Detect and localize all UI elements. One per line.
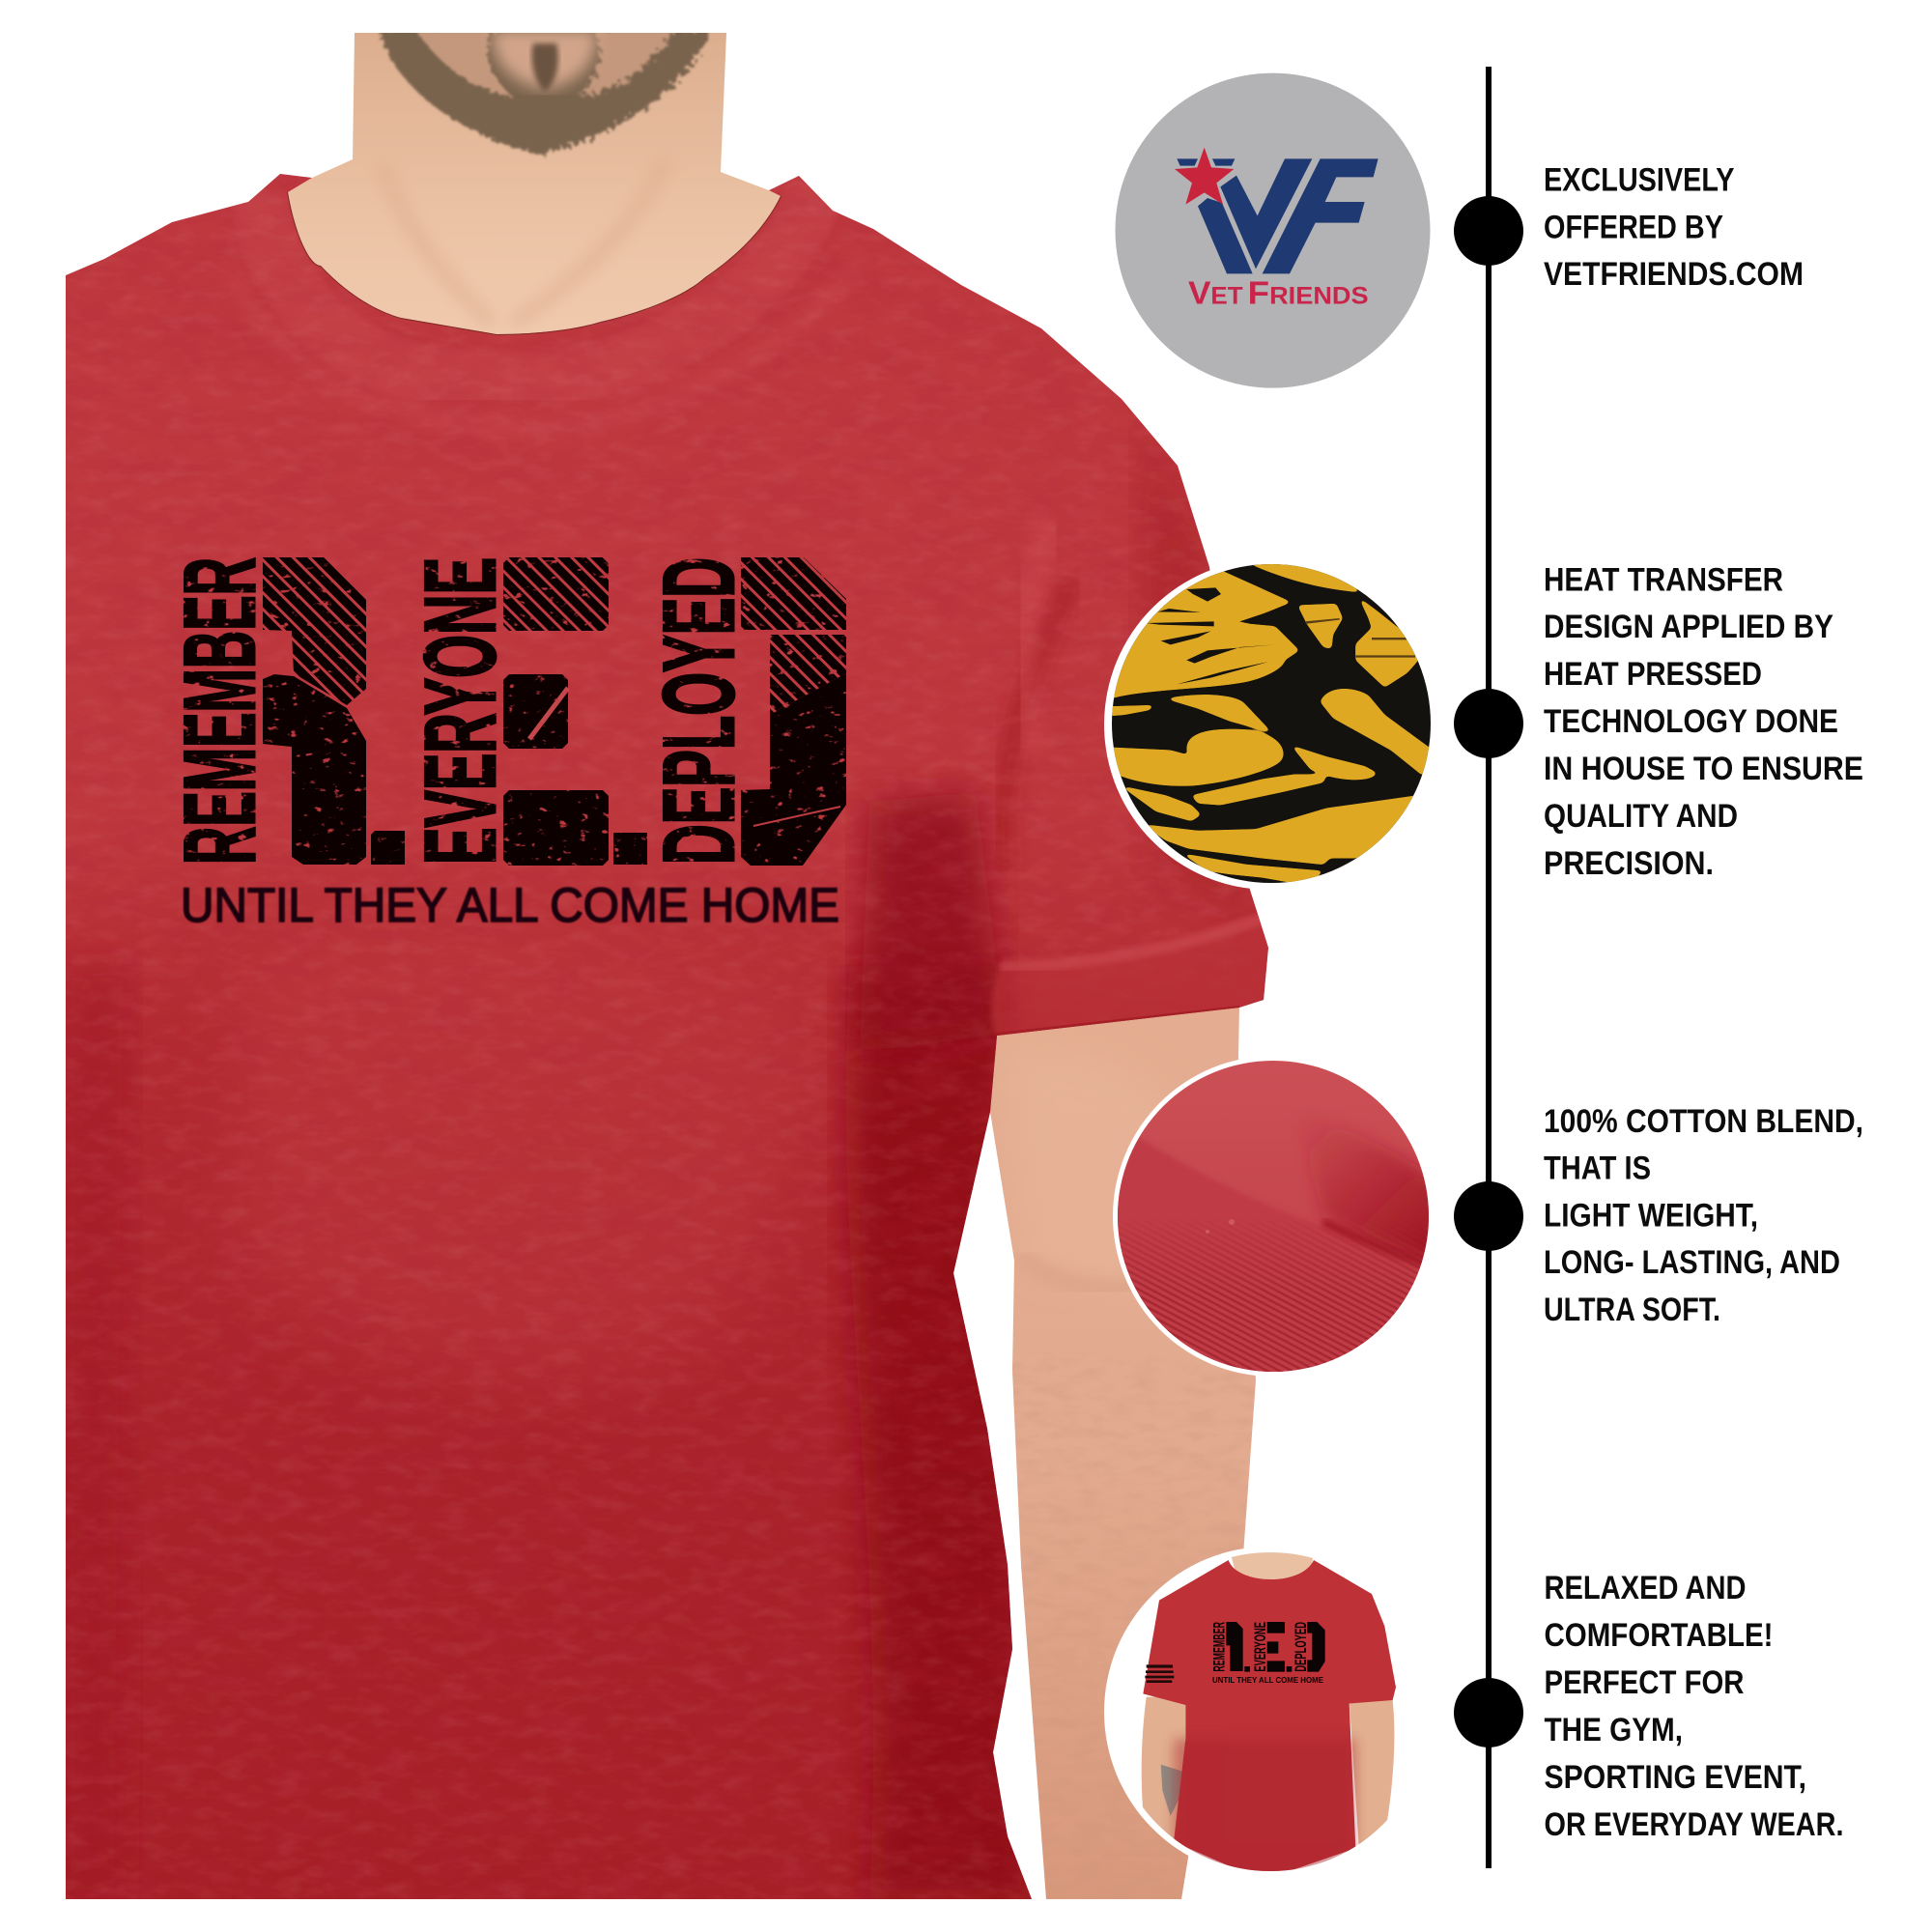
text block: relaxed and comfortable: SPORTING EVENT, [1544, 1759, 1806, 1796]
thumbnail print: EVERYONE [1251, 1622, 1269, 1672]
beard [379, 29, 711, 155]
text block: relaxed and comfortable: PERFECT FOR [1544, 1664, 1745, 1701]
t-shirt body [58, 164, 1285, 1903]
text block: exclusively offered: OFFERED BY [1544, 209, 1723, 245]
circle: fabric close-up [1111, 1053, 1439, 1381]
thumbnail print: UNTIL THEY ALL COME HOME [1212, 1676, 1324, 1685]
logo mark: FRIENDS [1248, 275, 1369, 311]
sleeve hem [991, 908, 1268, 1036]
text block: relaxed and comfortable: COMFORTABLE! [1544, 1617, 1774, 1654]
thumbnail print: DEPLOYED [1292, 1622, 1310, 1672]
text block: heat transfer [1544, 562, 1863, 882]
circle: VetFriends logo [1115, 73, 1430, 388]
thumbnail print [1210, 1622, 1325, 1685]
timeline dot 2 [1454, 689, 1523, 758]
text block: heat transfer: QUALITY AND [1544, 798, 1738, 835]
logo mark: VET [1188, 275, 1243, 311]
logo mark [1175, 148, 1378, 311]
photo: model in red t-shirt [58, 29, 1285, 1903]
thumbnail print: REMEMBER [1210, 1622, 1229, 1672]
vertical word: DEPLOYED: DEPLOYED [643, 557, 755, 865]
text block: heat transfer: TECHNOLOGY DONE [1544, 703, 1838, 740]
timeline dot 1 [1454, 196, 1523, 266]
chest print: R.E.D. design [164, 557, 846, 866]
text block: heat transfer: HEAT TRANSFER [1544, 562, 1783, 599]
big letter D [741, 557, 846, 866]
thumbnail arms [1142, 1697, 1394, 1845]
text block: relaxed and comfortable [1544, 1570, 1843, 1843]
text block: cotton blend: LIGHT WEIGHT, [1544, 1198, 1758, 1235]
text block: relaxed and comfortable: RELAXED AND [1544, 1570, 1747, 1606]
thumbnail sleeve flag [1145, 1664, 1174, 1683]
text block: heat transfer: IN HOUSE TO ENSURE [1544, 751, 1863, 787]
circle: print close-up [1104, 564, 1431, 889]
timeline dot 3 [1454, 1181, 1523, 1251]
text block: cotton blend: ULTRA SOFT. [1544, 1292, 1720, 1328]
text block: cotton blend: LONG- LASTING, AND [1544, 1244, 1840, 1281]
big letter R [263, 557, 405, 865]
text block: exclusively offered: EXCLUSIVELY [1544, 162, 1735, 199]
big letter E [503, 557, 647, 866]
collar ribbing [234, 191, 836, 213]
arm skin [985, 1005, 1275, 1903]
tagline: UNTIL THEY ALL COME HOME [181, 878, 839, 932]
vertical word: EVERYONE: EVERYONE [405, 557, 517, 865]
text block: heat transfer: HEAT PRESSED [1544, 656, 1762, 693]
vertical word: REMEMBER: REMEMBER [164, 557, 276, 865]
text block: cotton blend [1544, 1103, 1863, 1328]
text block: exclusively offered: VETFRIENDS.COM [1544, 256, 1804, 293]
text block: heat transfer: PRECISION. [1544, 845, 1714, 882]
circle: full shirt thumbnail [1104, 1548, 1396, 1871]
neck and chin [288, 29, 781, 334]
text block: cotton blend: 100% COTTON BLEND, [1544, 1103, 1863, 1140]
timeline line [1486, 67, 1492, 1868]
thumbnail shirt [1143, 1560, 1396, 1881]
text block: heat transfer: DESIGN APPLIED BY [1544, 609, 1833, 645]
timeline dot 4 [1454, 1678, 1523, 1747]
thumbnail neck [1231, 1552, 1314, 1579]
text block: relaxed and comfortable: THE GYM, [1544, 1712, 1683, 1748]
thumbnail tattoo [1161, 1765, 1181, 1816]
text block: exclusively offered [1544, 162, 1804, 293]
text block: relaxed and comfortable: OR EVERYDAY WEAR. [1544, 1806, 1843, 1843]
text block: cotton blend: THAT IS [1544, 1150, 1651, 1186]
